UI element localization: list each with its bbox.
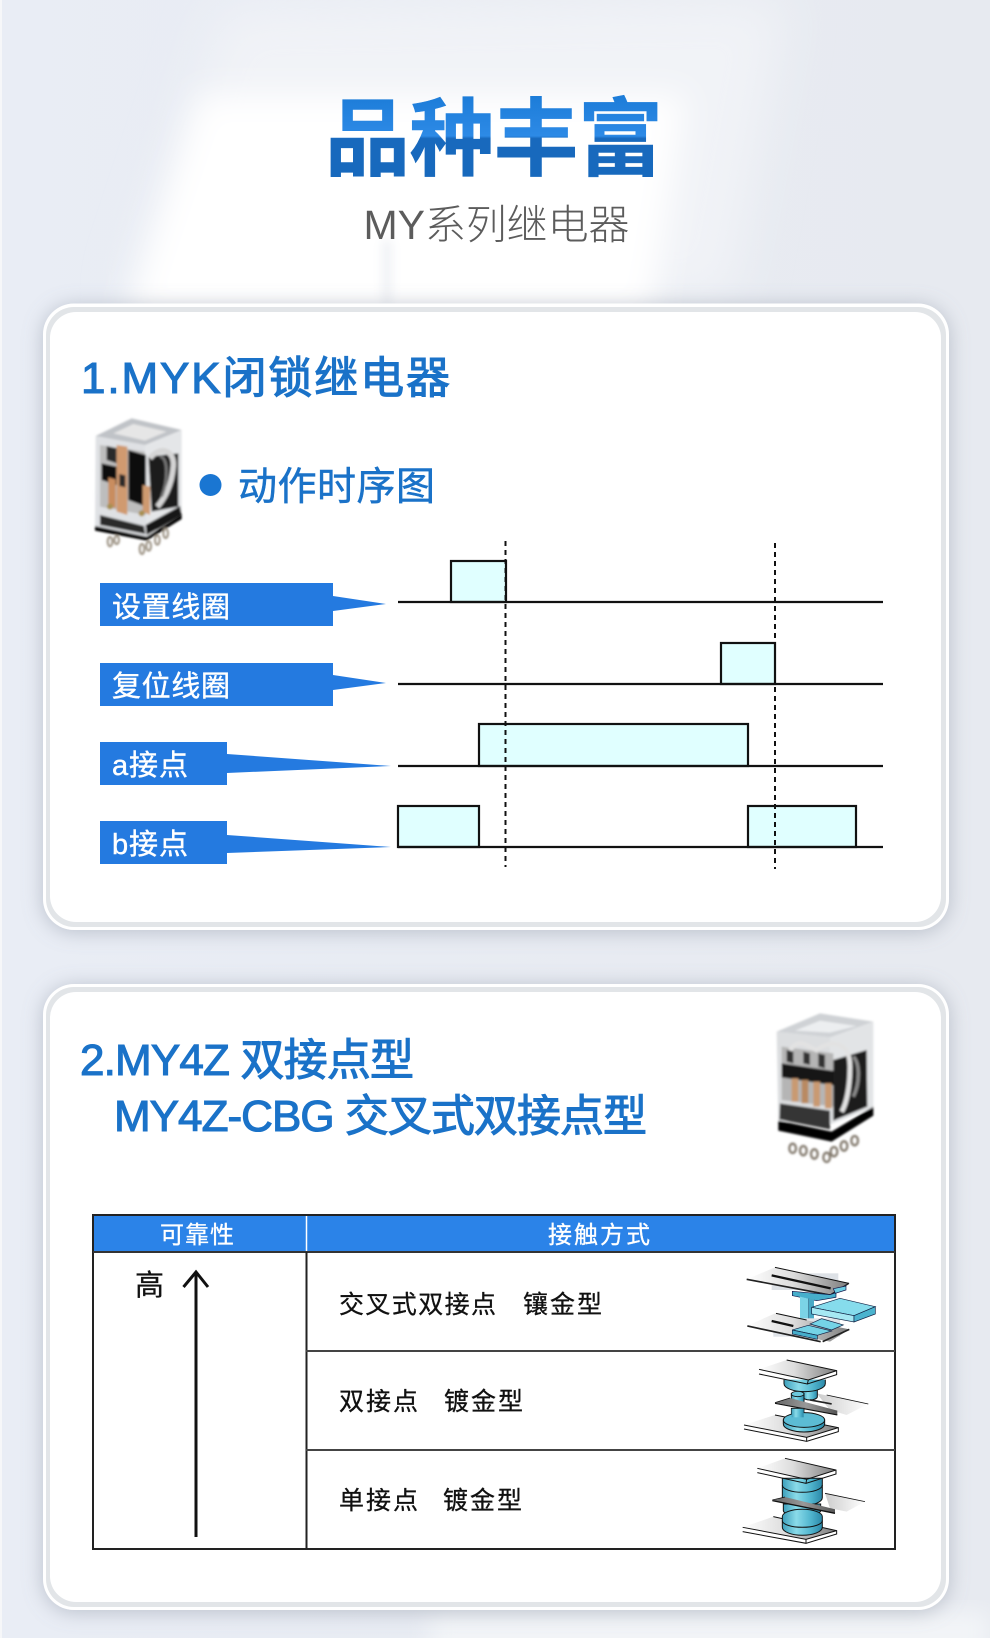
label: b contact xyxy=(100,821,391,864)
icon: relay photo MYK xyxy=(95,418,182,554)
bullet xyxy=(200,474,222,496)
label: a contact xyxy=(100,742,391,785)
row: bifurcated gold plated: 镀金型 xyxy=(444,1388,523,1416)
heading: timing chart: 动作时序图 xyxy=(238,466,435,509)
icon: relay photo MY4Z xyxy=(777,1013,873,1162)
waveform: set coil xyxy=(398,561,883,602)
row: crossbar bifurcated gold clad xyxy=(339,1291,602,1319)
row: crossbar bifurcated gold clad: 镶金型 xyxy=(523,1291,602,1319)
table header xyxy=(93,1215,895,1252)
arrow: reliability rises upward xyxy=(184,1272,208,1537)
label: a contact: a接点 xyxy=(112,749,188,782)
row: single gold plated: 单接点 xyxy=(339,1487,418,1515)
row: single gold plated: 镀金型 xyxy=(443,1487,522,1515)
waveform: b contact xyxy=(398,806,883,847)
waveform: reset coil xyxy=(398,643,883,684)
icon: bifurcated contact xyxy=(744,1360,868,1441)
chart: timing diagram xyxy=(100,541,883,869)
label: reset coil: 复位线圈 xyxy=(112,670,230,703)
title: 品种丰富 xyxy=(325,93,663,188)
row: crossbar bifurcated gold clad: 交叉式双接点 xyxy=(339,1291,496,1319)
heading: MYK latching relay: 1.MYK闭锁继电器 xyxy=(81,354,450,403)
panel: MYK latching relay xyxy=(43,304,949,930)
heading: MY4Z-CBG: MY4Z-CBG 交叉式双接点型 xyxy=(114,1092,647,1141)
label: set coil xyxy=(100,583,386,626)
heading: MY4Z: 2.MY4Z 双接点型 xyxy=(80,1036,414,1085)
icon: single contact xyxy=(743,1458,865,1543)
waveform: a contact xyxy=(398,724,883,766)
dashed time markers xyxy=(506,541,775,869)
icon: crossbar contact xyxy=(747,1267,875,1342)
label: high: 高 xyxy=(135,1269,164,1302)
row: bifurcated gold plated xyxy=(339,1388,523,1416)
header cell: reliability: 可靠性 xyxy=(160,1222,234,1249)
row: bifurcated gold plated: 双接点 xyxy=(339,1388,418,1416)
header cell: contact method: 接触方式 xyxy=(548,1222,650,1249)
table grid xyxy=(93,1215,895,1549)
panel: MY4Z double contact xyxy=(43,984,949,1610)
table: contact types xyxy=(93,1215,895,1549)
row: single gold plated xyxy=(339,1487,522,1515)
label: reset coil xyxy=(100,663,386,706)
label: b contact: b接点 xyxy=(112,828,188,861)
label: set coil: 设置线圈 xyxy=(112,591,230,624)
subtitle: MY系列继电器 xyxy=(364,202,630,248)
